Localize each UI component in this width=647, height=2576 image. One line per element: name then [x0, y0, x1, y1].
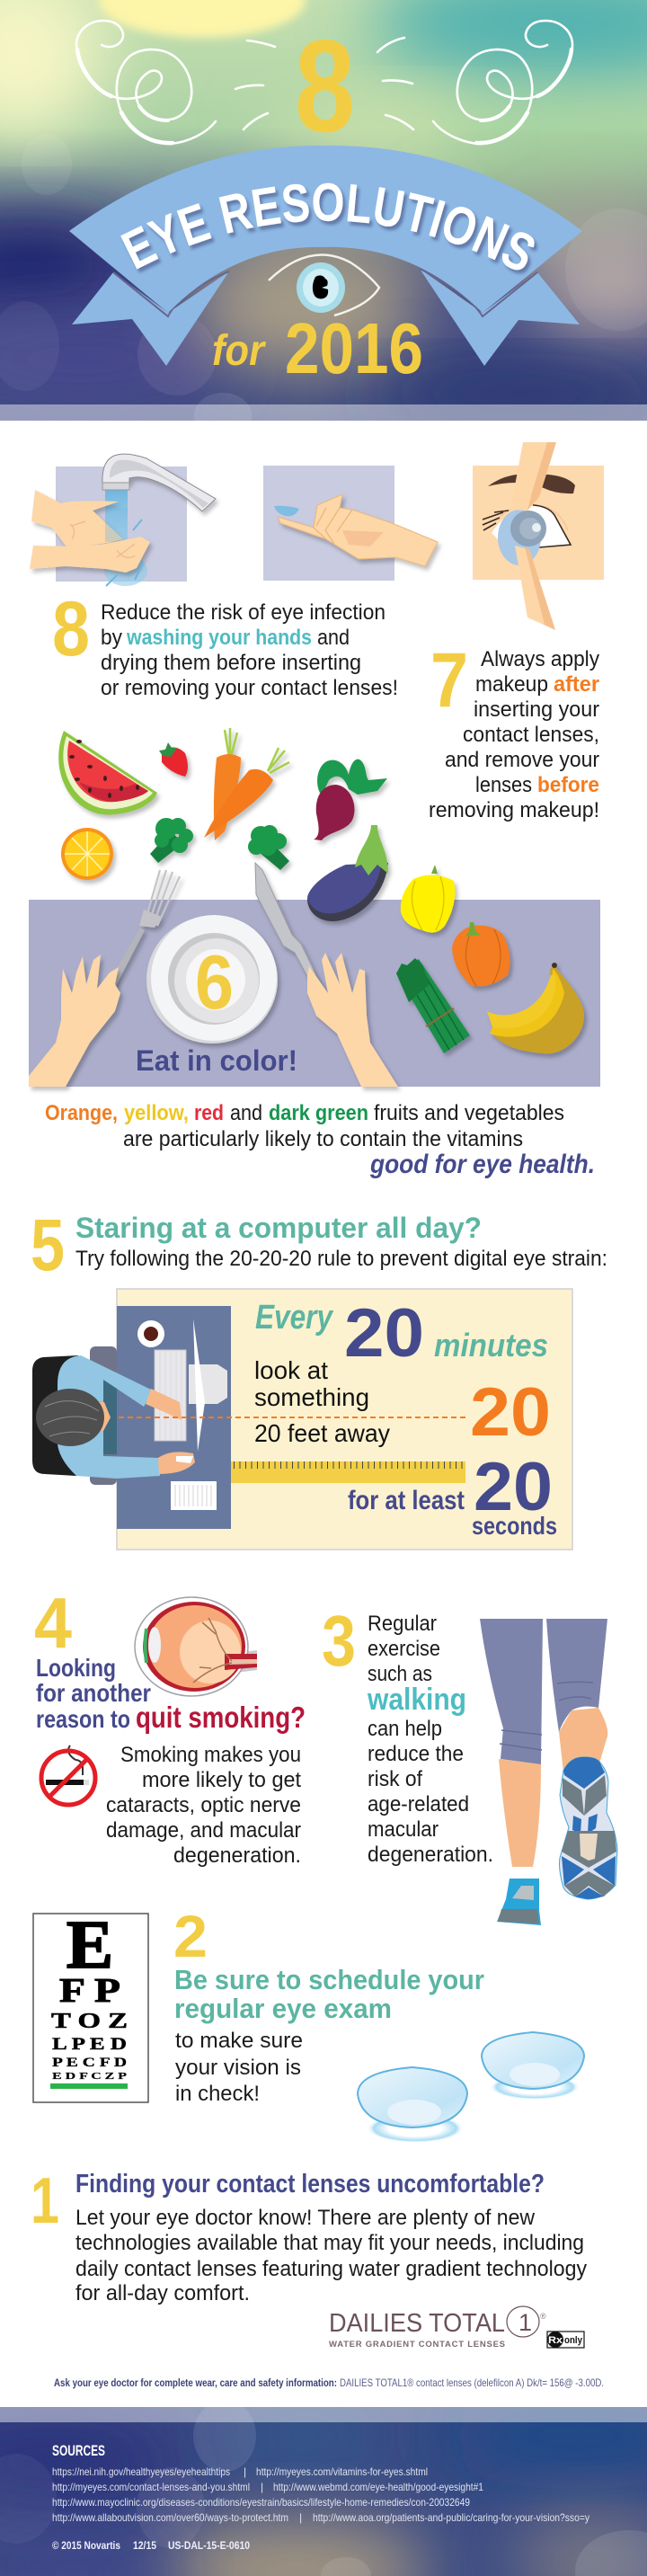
text: makeup: Always apply [481, 647, 599, 671]
text: for at least 20 seconds: seconds [472, 1512, 557, 1540]
for 2016 [212, 308, 423, 388]
header banner [0, 0, 647, 421]
source links: | [299, 2511, 302, 2524]
icon: yellow pepper [401, 865, 455, 933]
text: colorful foods: good for eye health. [369, 1150, 595, 1179]
icon: eye chart: T O Z [51, 2010, 128, 2033]
text: vision check: in check! [175, 2082, 260, 2106]
number 5: 5 [31, 1204, 65, 1286]
text: smoking risks: degeneration. [173, 1843, 301, 1868]
text: look at something 20 feet away: 20 feet away [254, 1419, 390, 1447]
text: walking: risk of [368, 1767, 422, 1791]
icon: eye chart [33, 1907, 148, 2102]
icon: person at desk [32, 1346, 195, 1485]
text: makeup [429, 647, 599, 822]
badge: Rx only [547, 2332, 584, 2348]
number 7: 7 [430, 637, 468, 724]
text: washing hands [101, 600, 398, 700]
source links: https://nei.nih.gov/healthyeyes/eyehealthtips [52, 2465, 230, 2478]
text: makeup: removing makeup! [429, 798, 599, 822]
text: vision check [175, 2029, 303, 2106]
text: eye doctor [75, 2206, 587, 2305]
heading: eye exam: regular eye exam [174, 1993, 392, 2024]
icon: banana [487, 963, 584, 1053]
icon: right hand [307, 953, 398, 1087]
text: colorful foods: yellow, [124, 1101, 189, 1125]
icon: watermelon [58, 731, 157, 814]
text: eye doctor: Let your eye doctor know! There are plenty of new [75, 2206, 536, 2230]
icon: carrots [204, 728, 289, 840]
text: walking: Regular [368, 1612, 437, 1636]
heading: quit smoking: Looking [36, 1654, 116, 1682]
icon: eye chart: E [66, 1907, 113, 1983]
text: colorful foods: are particularly likely to contain the vitamins [123, 1127, 523, 1151]
text: colorful foods [45, 1101, 595, 1179]
number 3: 3 [322, 1601, 356, 1681]
number 6: 6 [195, 940, 234, 1026]
text: every 20 minutes: 20 [344, 1295, 424, 1372]
text: look at something 20 feet away: something [254, 1383, 369, 1411]
icon: eye anatomy [135, 1597, 257, 1696]
for 2016: 2016 [285, 308, 423, 388]
logo: dailies total 1: ® [540, 2312, 546, 2321]
text: smoking risks: more likely to get [142, 1768, 301, 1792]
icon: no smoking [41, 1745, 95, 1805]
text: smoking risks: cataracts, optic nerve [106, 1793, 301, 1817]
icon: beet [314, 759, 387, 840]
text: colorful foods: Orange, [45, 1101, 118, 1125]
source links: http://www.aoa.org/patients-and-public/caring-for-your-vision?sso=y [313, 2511, 589, 2524]
text: washing hands: washing your hands [126, 626, 312, 650]
number 2: 2 [173, 1903, 208, 1969]
icon: fork [115, 870, 184, 991]
icon: knife [255, 863, 328, 1003]
icon: orange [61, 828, 113, 880]
text: eye doctor: daily contact lenses featuring water gradient technology [75, 2257, 587, 2281]
text: eye doctor: technologies available that may fit your needs, including [75, 2231, 584, 2255]
badge: Rx only: only [564, 2335, 583, 2346]
icon: keyboard [155, 1350, 186, 1441]
big number 8: 8 [295, 13, 355, 159]
icon: eggplant [307, 825, 388, 921]
text: washing hands: Reduce the risk of eye infection [101, 600, 386, 625]
logo: dailies total 1: WATER GRADIENT CONTACT LENSES [329, 2340, 505, 2349]
dashed sight line [119, 1417, 468, 1418]
number 1: 1 [31, 2165, 59, 2237]
source links: | [261, 2481, 263, 2493]
text: smoking risks: Smoking makes you [120, 1743, 301, 1767]
decorative swirls [76, 21, 572, 144]
text: for at least 20 seconds [348, 1449, 557, 1540]
text: look at something 20 feet away: look at [254, 1356, 328, 1384]
desk [117, 1306, 231, 1529]
number 8: 8 [52, 586, 90, 672]
text: walking: age-related [368, 1792, 469, 1817]
source links: http://www.allaboutvision.com/over60/ways-to-protect.htm [52, 2511, 288, 2524]
text: walking: exercise [368, 1637, 440, 1661]
ruler [231, 1461, 465, 1483]
text: colorful foods: fruits and vegetables [374, 1101, 564, 1125]
panel: table [29, 900, 600, 1087]
heading: eye exam: Be sure to schedule your [174, 1964, 484, 1995]
text: vision check: your vision is [175, 2056, 301, 2080]
logo: dailies total 1: DAILIES TOTAL [329, 2309, 505, 2338]
heading: eye exam [174, 1964, 484, 2024]
safety note: Ask your eye doctor for complete wear, care and safety information: [54, 2376, 337, 2389]
text: makeup: after [554, 672, 599, 697]
ribbon [69, 146, 582, 366]
heading: quit smoking: for another [36, 1679, 151, 1707]
panel: resolution 8 and 7 illustrations [30, 442, 604, 630]
icon: plate [146, 915, 278, 1044]
icon: hand holding lens [263, 466, 438, 581]
badge: Rx only: Rx [548, 2335, 563, 2346]
copyright line: US-DAL-15-E-0610 [168, 2539, 250, 2552]
copyright line: 12/15 [133, 2539, 156, 2552]
text: 20-20-20 intro: Try following the 20-20-20 rule to prevent digital eye strain: [75, 1247, 607, 1271]
icon: eye chart: E D F C Z P [52, 2071, 127, 2082]
heading: quit smoking: reason to [36, 1705, 130, 1733]
text: makeup: lenses [475, 773, 532, 797]
for 2016: for [212, 327, 266, 375]
source links: http://myeyes.com/contact-lenses-and-you.shtml [52, 2481, 250, 2493]
source links [52, 2465, 589, 2524]
heading: computer: Staring at a computer all day? [75, 1212, 482, 1244]
icon: monitor [189, 1319, 227, 1452]
text: every 20 minutes: Every [255, 1299, 334, 1337]
icon: eye chart: F P [59, 1972, 120, 2010]
number 4: 4 [34, 1583, 72, 1663]
source links: http://www.mayoclinic.org/diseases-conditions/eyestrain/basics/lifestyle-home-remedies/con-20032649 [52, 2496, 470, 2509]
icon: walking legs [480, 1619, 617, 1925]
footer [0, 2400, 647, 2576]
safety note [54, 2376, 604, 2389]
text: eye doctor: for all-day comfort. [75, 2281, 250, 2305]
icon: eye chart: P E C F D [52, 2056, 127, 2070]
heading: uncomfortable lenses: Finding your contact lenses uncomfortable? [75, 2170, 545, 2198]
icon: left hand [29, 955, 120, 1087]
text: makeup: before [537, 773, 599, 797]
heading: quit smoking: quit smoking? [136, 1701, 306, 1734]
icon: eye [269, 255, 379, 315]
icon: contact lenses [358, 2032, 584, 2143]
text: look at something 20 feet away [254, 1356, 551, 1451]
text: walking: can help [368, 1717, 442, 1741]
text: makeup: inserting your [474, 697, 599, 722]
text: colorful foods: and [230, 1101, 262, 1125]
icon: broccoli right [248, 825, 289, 870]
text: makeup: and remove your [445, 748, 599, 772]
text: washing hands: or removing your contact lenses! [101, 676, 398, 700]
source links: http://www.webmd.com/eye-health/good-eyesight#1 [273, 2481, 483, 2493]
text: washing hands: by [101, 626, 122, 650]
logo: dailies total 1: 1 [518, 2309, 532, 2336]
text: every 20 minutes [255, 1295, 548, 1372]
text: makeup: contact lenses, [463, 723, 599, 747]
text: makeup: makeup [475, 672, 548, 697]
text: walking: degeneration. [368, 1843, 493, 1867]
text: colorful foods: red [194, 1101, 224, 1125]
panel: 20-20-20 rule [32, 1289, 572, 1550]
food illustrations [58, 728, 584, 1053]
text: vision check: to make sure [175, 2029, 303, 2053]
ribbon title: EYE RESOLUTIONS [120, 183, 539, 275]
icon: coffee cup [137, 1320, 164, 1347]
text: every 20 minutes: minutes [434, 1327, 548, 1364]
text: smoking risks [106, 1743, 301, 1868]
text: washing hands: drying them before inserting [101, 651, 361, 675]
text: walking [367, 1612, 493, 1867]
icon: strawberry [159, 742, 188, 777]
text: walking: walking [367, 1683, 466, 1717]
text: for at least 20 seconds: for at least [348, 1486, 465, 1515]
logo: dailies total 1 [329, 2306, 546, 2349]
heading: quit smoking [36, 1654, 306, 1734]
text: look at something 20 feet away: 20 [470, 1374, 551, 1451]
text: colorful foods: dark green [269, 1101, 368, 1125]
icon: orange pepper [452, 922, 510, 987]
source links: http://myeyes.com/vitamins-for-eyes.shtml [256, 2465, 428, 2478]
sources heading: SOURCES [52, 2442, 105, 2459]
source links: | [244, 2465, 246, 2478]
icon: paper [171, 1481, 217, 1510]
text: walking: such as [368, 1662, 432, 1686]
icon: applying lens to eye [473, 442, 604, 630]
text: walking: reduce the [368, 1742, 464, 1766]
text: washing hands: and [317, 626, 350, 650]
copyright line [52, 2539, 250, 2552]
icon: washing hands [30, 454, 216, 586]
icon: asparagus [396, 958, 470, 1053]
icon: broccoli left [150, 818, 193, 863]
text: smoking risks: damage, and macular [106, 1818, 301, 1843]
text: walking: macular [368, 1817, 439, 1842]
eat in color heading: Eat in color! [136, 1044, 297, 1077]
icon: eye chart: L P E D [52, 2035, 127, 2054]
copyright line: © 2015 Novartis [52, 2539, 120, 2552]
text: for at least 20 seconds: 20 [474, 1449, 553, 1525]
